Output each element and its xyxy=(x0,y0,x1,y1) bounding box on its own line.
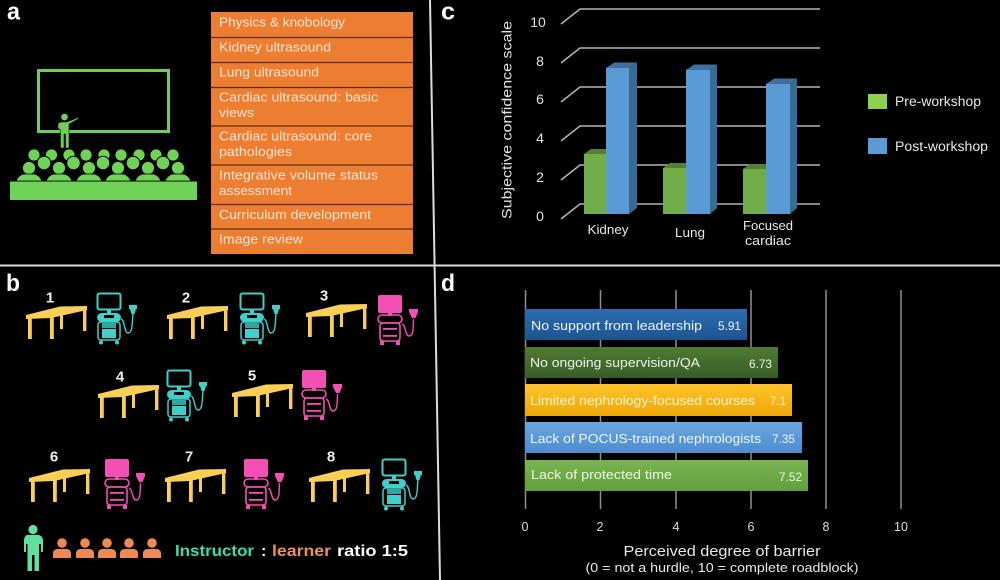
category labels: Lung xyxy=(675,225,705,240)
bar: supervision: 6.73 xyxy=(749,357,772,371)
projection screen xyxy=(38,70,168,132)
audience back row xyxy=(28,149,179,161)
curriculum list: views xyxy=(219,105,255,120)
panel label d: d xyxy=(441,270,455,297)
station 1: 1 xyxy=(46,290,54,306)
lung bars xyxy=(663,64,717,214)
x axis ticks: 10 xyxy=(894,520,908,534)
bar: leadership xyxy=(525,309,747,340)
curriculum list: Curriculum development xyxy=(219,207,371,222)
category labels: cardiac xyxy=(745,233,792,248)
bar: protected time: 7.52 xyxy=(779,470,802,484)
station 2 xyxy=(167,290,280,344)
station 4 xyxy=(98,368,207,422)
curriculum list: Physics & knobology xyxy=(219,14,346,30)
category labels xyxy=(588,218,793,248)
x axis ticks: 2 xyxy=(597,520,604,534)
y axis ticks: 6 xyxy=(536,91,544,107)
y axis title: Subjective confidence scale xyxy=(498,21,514,219)
y axis ticks: 2 xyxy=(536,169,544,185)
icon: lecture scene with audience xyxy=(10,70,197,200)
bar: supervision: No ongoing supervision/QA xyxy=(530,355,700,370)
bar: nephrologists xyxy=(525,422,802,453)
panel a: lecture and curriculum xyxy=(7,0,413,254)
bar: nephrologists: Lack of POCUS-trained nephrologists xyxy=(530,431,762,446)
y axis ticks: 8 xyxy=(536,53,544,69)
legend xyxy=(868,94,988,154)
station 4: 4 xyxy=(116,368,125,386)
bar: protected time xyxy=(525,460,808,491)
bar: supervision xyxy=(525,347,778,378)
instructor to learner ratio xyxy=(175,543,408,560)
legend: Pre-workshop xyxy=(895,94,981,109)
instructor to learner ratio: Instructor xyxy=(175,543,254,560)
icon: instructor xyxy=(24,525,43,571)
x axis subtitle: (0 = not a hurdle, 10 = complete roadblock) xyxy=(586,561,858,575)
station 5: 5 xyxy=(248,368,256,384)
panel label b: b xyxy=(6,270,20,297)
y axis ticks xyxy=(530,14,546,224)
x axis ticks: 0 xyxy=(522,520,529,534)
stage platform xyxy=(10,182,197,200)
panel b: stations layout xyxy=(6,270,422,571)
station 1 xyxy=(26,290,137,344)
curriculum list: Kidney ultrasound xyxy=(219,40,331,54)
presenter xyxy=(58,113,79,148)
instructor to learner ratio: ratio 1:5 xyxy=(337,543,408,560)
bar: courses: Limited nephrology-focused courses xyxy=(530,393,756,408)
bar: courses xyxy=(525,384,792,416)
curriculum list: assessment xyxy=(219,183,292,198)
station 6 xyxy=(29,448,145,509)
x axis ticks xyxy=(522,520,908,534)
kidney bars xyxy=(584,62,637,214)
curriculum list: Cardiac ultrasound: core xyxy=(219,128,372,144)
curriculum list: Image review xyxy=(219,232,304,246)
bar: leadership: 5.91 xyxy=(718,319,741,333)
horizontal bar chart xyxy=(522,290,908,575)
instructor to learner ratio: : xyxy=(261,543,266,560)
y axis ticks: 4 xyxy=(536,130,544,146)
bar: courses: 7.1 xyxy=(770,394,786,408)
bar: protected time: Lack of protected time xyxy=(531,467,672,482)
x axis ticks: 4 xyxy=(673,520,680,534)
x axis ticks: 8 xyxy=(823,520,830,534)
y axis ticks: 0 xyxy=(536,208,544,224)
audience front row xyxy=(16,162,191,181)
audience middle row xyxy=(37,156,170,170)
curriculum list xyxy=(211,12,413,254)
curriculum list: Lung ultrasound xyxy=(219,64,319,80)
icon: five learners xyxy=(53,538,161,558)
x axis title: Perceived degree of barrier xyxy=(624,544,821,560)
curriculum list: Integrative volume status xyxy=(219,168,379,182)
station 8: 8 xyxy=(327,448,335,466)
bar: nephrologists: 7.35 xyxy=(772,432,795,446)
station 6: 6 xyxy=(50,448,58,466)
station 7: 7 xyxy=(185,448,193,466)
panel d: barriers chart xyxy=(441,270,908,575)
3D bar chart xyxy=(498,9,820,248)
panel c: confidence chart xyxy=(441,0,988,248)
station 3: 3 xyxy=(320,288,328,304)
bar: leadership: No support from leadership xyxy=(531,318,702,333)
curriculum list: pathologies xyxy=(219,144,293,159)
legend: Post-workshop xyxy=(895,139,988,154)
station 2: 2 xyxy=(182,290,190,306)
station 3 xyxy=(306,288,418,345)
station 7 xyxy=(165,448,284,509)
x axis ticks: 6 xyxy=(748,520,755,534)
y axis ticks: 10 xyxy=(530,14,546,30)
instructor to learner ratio: learner xyxy=(272,543,331,560)
station 8 xyxy=(309,448,422,510)
category labels: Kidney xyxy=(588,222,629,237)
station 5 xyxy=(232,368,342,420)
category labels: Focused xyxy=(743,218,793,233)
curriculum list: Cardiac ultrasound: basic xyxy=(219,90,379,104)
focused cardiac bars xyxy=(743,78,797,214)
